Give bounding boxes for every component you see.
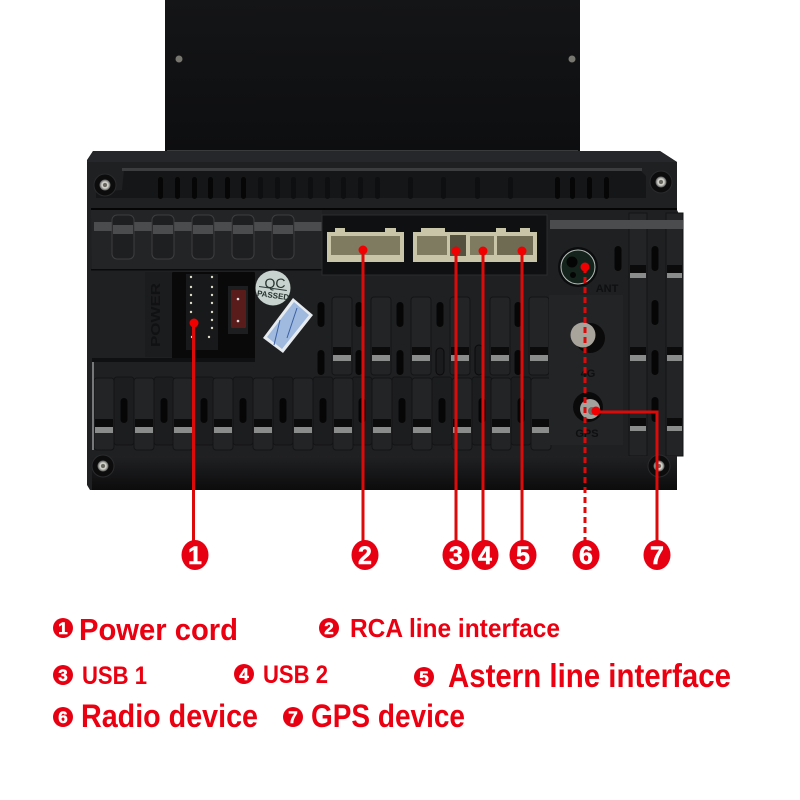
legend: USB 2: 4 <box>239 665 249 684</box>
marker 5: 5 <box>516 542 530 570</box>
leader line 2 <box>362 250 364 543</box>
right side ribs <box>550 213 683 456</box>
icon: top left screw <box>176 56 182 62</box>
marker 2: 2 <box>358 542 372 570</box>
device: main rear housing <box>87 151 683 490</box>
numbered callout markers <box>182 540 670 570</box>
icon: housing top left screw <box>94 174 116 196</box>
legend <box>53 612 731 734</box>
power connector block <box>92 271 255 362</box>
icon: 4G port <box>570 322 605 353</box>
legend: radio device: Radio device <box>81 698 258 734</box>
upper rib row <box>318 297 549 375</box>
RCA connector <box>327 228 404 262</box>
legend: USB 1: 3 <box>58 666 68 685</box>
marker 3: 3 <box>449 542 463 570</box>
QC passed sticker <box>256 270 290 306</box>
legend: RCA line interface: 2 <box>324 619 334 638</box>
legend: USB 2: USB 2 <box>263 661 328 689</box>
legend: power cord: Power cord <box>79 612 238 647</box>
legend: USB 1: USB 1 <box>82 662 147 690</box>
leader line 5 <box>520 251 524 543</box>
marker 6: 6 <box>579 542 593 570</box>
lower rib row <box>92 360 551 450</box>
blue warranty sticker <box>263 298 313 353</box>
USB 1, USB 2 and astern connectors <box>413 228 537 262</box>
leader line 6 dashed <box>584 267 586 543</box>
antenna panel <box>549 247 623 445</box>
leader line 1 <box>192 323 195 543</box>
marker 4: 4 <box>478 542 492 570</box>
QC passed sticker: PASSED <box>256 289 290 302</box>
antenna panel: GPS <box>575 428 599 440</box>
legend: power cord: 1 <box>58 619 68 638</box>
icon: red fuse <box>228 286 248 334</box>
marker 1 <box>182 540 208 570</box>
power connector block: POWER <box>148 282 163 347</box>
vented top band <box>96 168 646 199</box>
legend: astern line interface: Astern line interface <box>448 657 731 694</box>
icon: GPS port <box>573 392 603 422</box>
leader line 4 <box>482 251 484 543</box>
upper ledge with tabs <box>91 210 322 270</box>
marker 7 <box>644 540 670 570</box>
marker 7: 7 <box>650 542 664 570</box>
legend: USB 2 <box>234 661 328 689</box>
antenna panel: 4G <box>581 368 595 380</box>
leader line 3 <box>454 251 458 543</box>
marker 3 <box>442 540 470 570</box>
antenna panel: ANT <box>596 283 619 295</box>
marker 5 <box>510 540 536 570</box>
legend: GPS device: 7 <box>288 708 298 727</box>
QC passed sticker: QC <box>264 275 286 291</box>
marker 6 <box>572 540 600 570</box>
legend: USB 1 <box>53 662 147 690</box>
icon: housing bottom right screw <box>648 455 670 477</box>
icon: housing bottom left screw <box>92 455 114 477</box>
leader line 7 <box>592 412 657 543</box>
device: upright screen back panel <box>165 0 580 153</box>
connector bay <box>322 215 547 275</box>
icon: radio antenna jack <box>558 247 598 287</box>
callout lines and anchor dots <box>190 246 657 543</box>
legend: GPS device: GPS device <box>311 698 465 734</box>
legend: astern line interface: 5 <box>419 668 429 687</box>
icon: housing top right screw <box>650 171 672 193</box>
marker 2 <box>352 540 378 570</box>
marker 4 <box>472 540 498 570</box>
icon: top right screw <box>568 56 576 62</box>
legend: RCA line interface: RCA line interface <box>350 613 560 643</box>
marker 1: 1 <box>188 542 202 570</box>
legend: radio device: 6 <box>58 708 68 727</box>
anchor dots <box>190 246 600 416</box>
